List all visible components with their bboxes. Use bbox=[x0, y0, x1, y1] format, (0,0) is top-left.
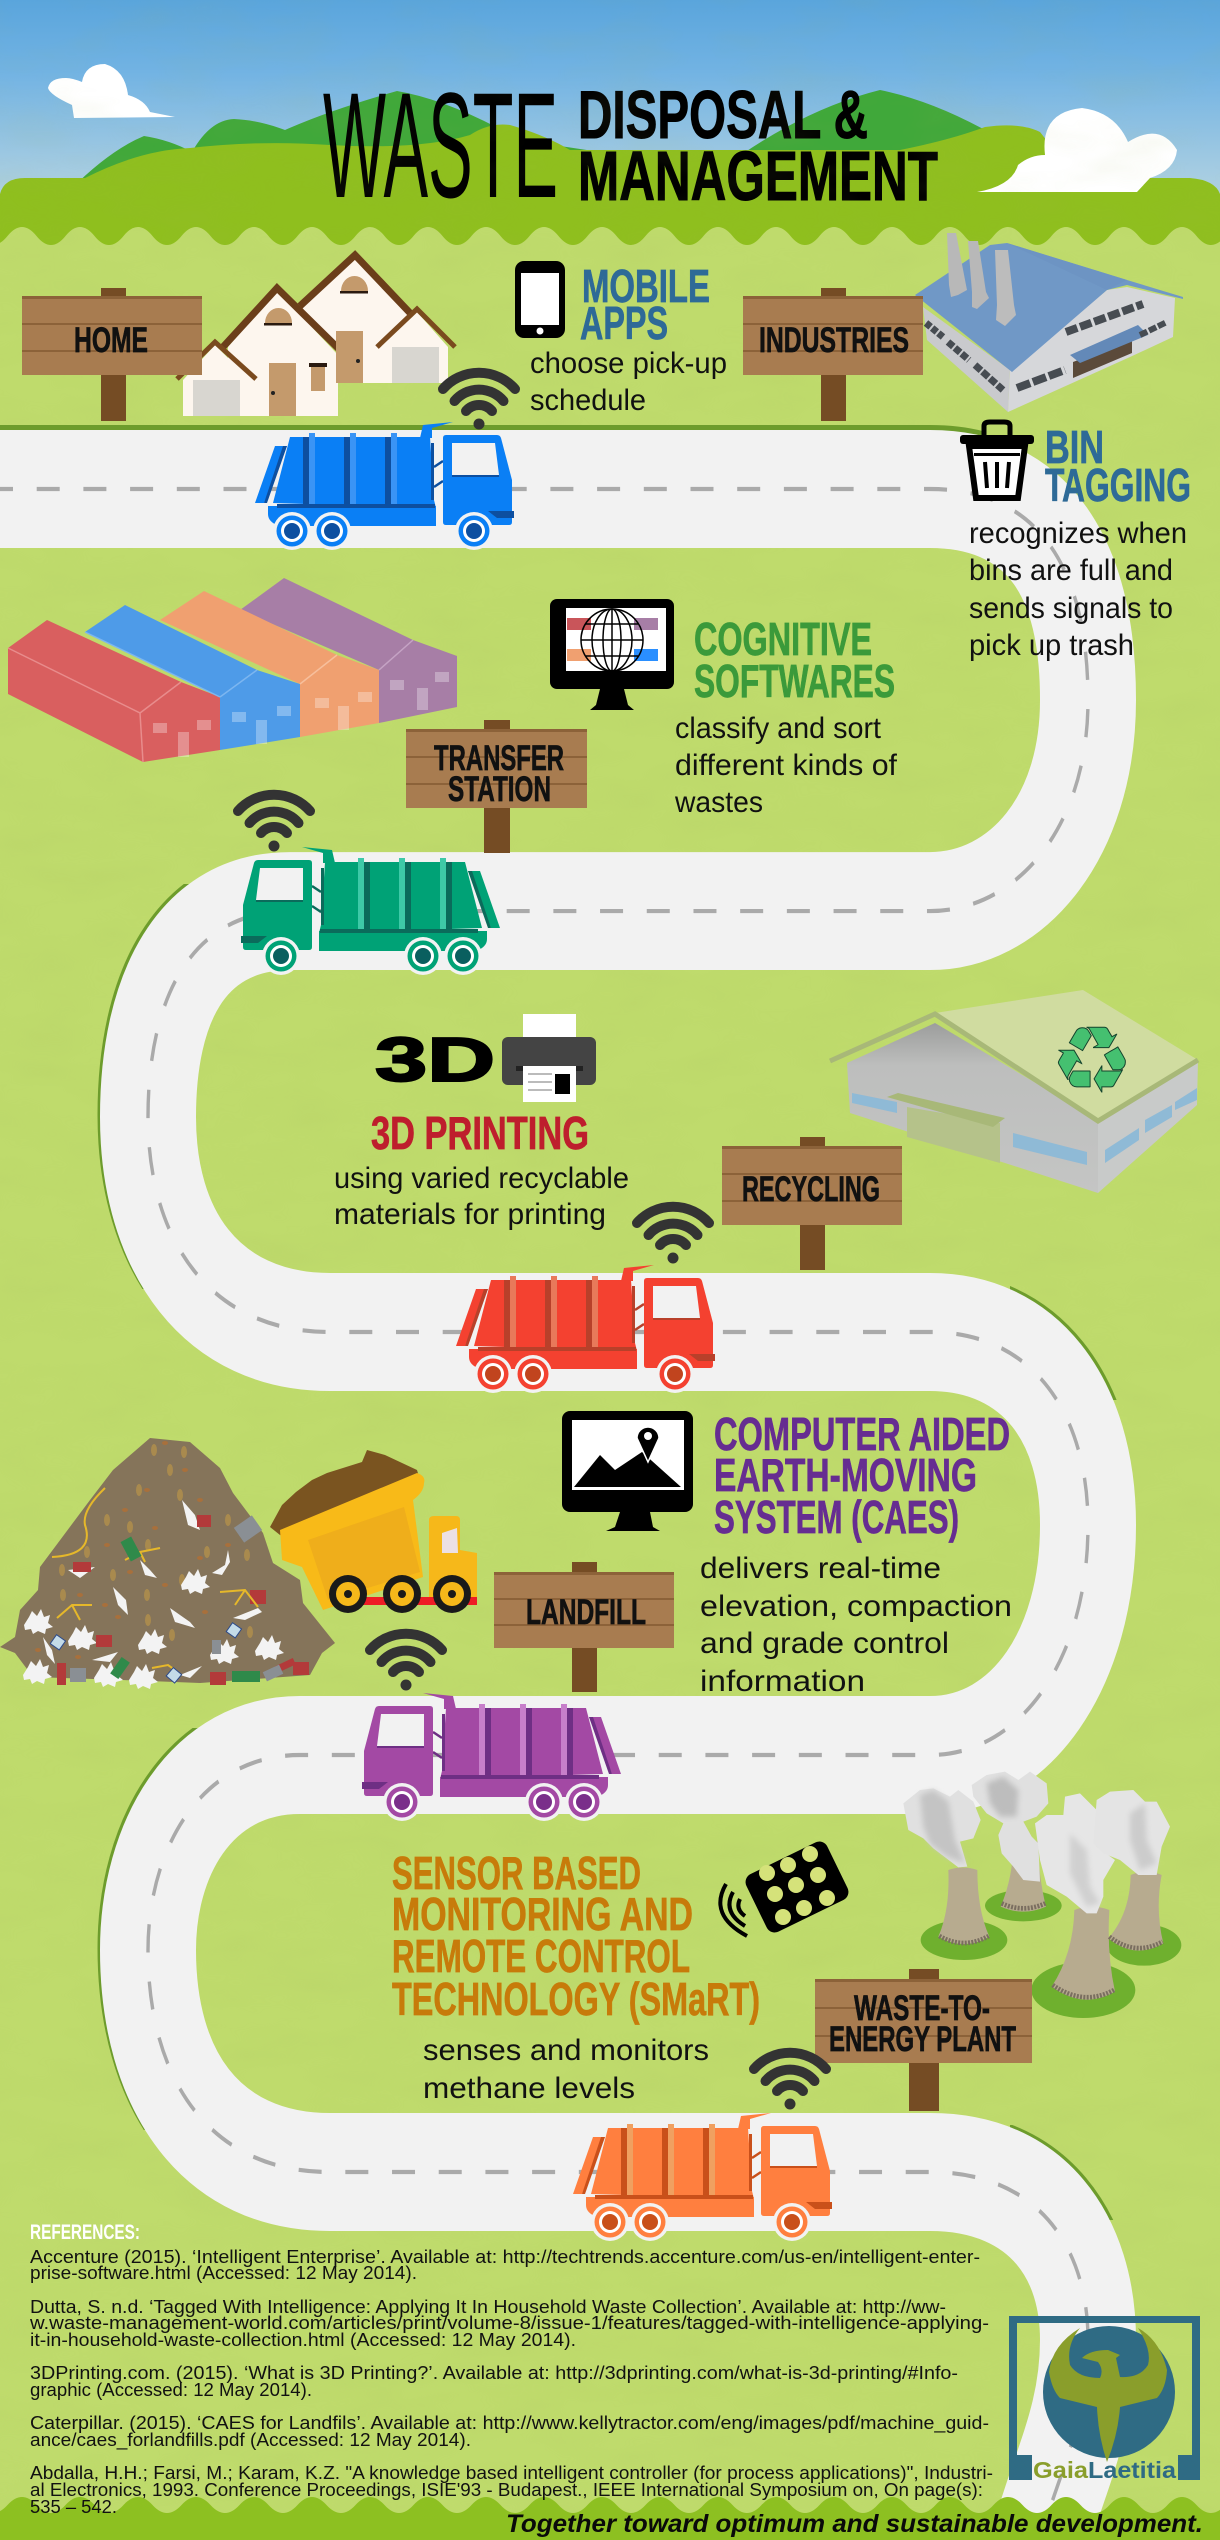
CAES text: elevation, compaction bbox=[700, 1590, 1012, 1623]
references: REFERENCES: bbox=[30, 2221, 140, 2244]
references: 3DPrinting.com. (2015). ‘What is 3D Printing?’. Available at: http://3dprinting.com/what-is-3d-printing/#Info- bbox=[30, 2363, 958, 2383]
icon: monitor with map bbox=[562, 1411, 693, 1531]
truck: red bbox=[456, 1265, 715, 1393]
bin tagging text: BIN bbox=[1045, 421, 1104, 473]
recycling building: ♻ bbox=[1051, 1007, 1133, 1114]
cloud left bbox=[48, 64, 175, 118]
references: prise-software.html (Accessed: 12 May 2014). bbox=[30, 2263, 417, 2283]
road shadows bbox=[0, 484, 1090, 2538]
sky bbox=[0, 0, 1220, 240]
sign: transfer station bbox=[406, 720, 587, 853]
sign: home bbox=[22, 288, 202, 421]
title: MANAGEMENT bbox=[578, 137, 938, 215]
mobile apps text: choose pick-up bbox=[530, 347, 727, 380]
road bbox=[0, 489, 1088, 2540]
references: it-in-household-waste-collection.html (Accessed: 12 May 2014). bbox=[30, 2330, 576, 2350]
cloud right bbox=[977, 108, 1177, 192]
CAES text bbox=[700, 1408, 1012, 1698]
references: al Electronics, 1993. Conference Proceedings, ISIE'93 - Budapest., IEEE International Symposium on, On page(s): bbox=[30, 2480, 983, 2500]
truck: green bbox=[241, 847, 500, 975]
title: WASTE bbox=[323, 61, 558, 229]
SMaRT text bbox=[392, 1847, 760, 2105]
cognitive softwares text: classify and sort bbox=[675, 712, 882, 745]
houses bbox=[177, 255, 455, 416]
icon: wifi orange truck bbox=[754, 2053, 826, 2110]
sign: transfer station: STATION bbox=[448, 770, 551, 809]
sign: landfill: LANDFILL bbox=[526, 1593, 646, 1632]
CAES text: information bbox=[700, 1665, 865, 1698]
SMaRT text: SENSOR BASED bbox=[392, 1847, 641, 1899]
CAES text: and grade control bbox=[700, 1627, 949, 1660]
mobile apps text: schedule bbox=[530, 384, 646, 417]
sign: waste-to-energy plant: WASTE-TO- bbox=[854, 1989, 990, 2028]
mobile apps text: APPS bbox=[580, 297, 668, 349]
icon: wifi blue truck bbox=[443, 373, 515, 430]
recycling building bbox=[830, 990, 1198, 1193]
truck: purple bbox=[362, 1693, 621, 1821]
icon: 3D printer: 3D bbox=[375, 1026, 495, 1095]
CAES text: COMPUTER AIDED bbox=[714, 1408, 1010, 1460]
mobile apps text: MOBILE bbox=[582, 260, 710, 312]
icon: sensor bbox=[720, 1839, 851, 1936]
references: Abdalla, H.H.; Farsi, M.; Karam, K.Z. "A knowledge based intelligent controller (for process applications)", Industri- bbox=[30, 2463, 993, 2483]
bin tagging text: pick up trash bbox=[969, 629, 1134, 662]
logo: Gaia Laetitia bbox=[1009, 2316, 1200, 2483]
SMaRT text: methane levels bbox=[423, 2072, 635, 2105]
factory bbox=[915, 233, 1183, 412]
cognitive softwares text bbox=[674, 613, 898, 819]
truck: orange bbox=[573, 2113, 832, 2241]
cognitive softwares text: different kinds of bbox=[675, 749, 898, 782]
references: w.waste-management-world.com/articles/print/volume-8/issue-1/features/tagged-with-intelligence-applying- bbox=[29, 2313, 989, 2333]
sign: landfill bbox=[494, 1562, 674, 1692]
SMaRT text: TECHNOLOGY (SMaRT) bbox=[392, 1973, 760, 2025]
3D printing text bbox=[334, 1107, 629, 1231]
icon: wifi purple truck bbox=[370, 1634, 442, 1690]
icon: monitor with globe bbox=[550, 599, 674, 710]
icon: trash bin bbox=[960, 422, 1034, 498]
tagline: Together toward optimum and sustainable development. bbox=[506, 2510, 1203, 2538]
bin tagging text: bins are full and bbox=[969, 554, 1173, 587]
references bbox=[29, 2221, 993, 2517]
references: Caterpillar. (2015). ‘CAES for Landfils’. Available at: http://www.kellytractor.com/eng/images/pdf/machine_guid- bbox=[30, 2413, 989, 2434]
hills: back dark green bbox=[70, 90, 1000, 190]
references: ance/caes_forlandfills.pdf (Accessed: 12 May 2014). bbox=[30, 2430, 471, 2451]
CAES text: EARTH-MOVING bbox=[714, 1449, 977, 1501]
sign: transfer station: TRANSFER bbox=[434, 739, 564, 778]
truck: blue bbox=[255, 422, 514, 550]
icon: wifi green truck bbox=[238, 795, 310, 852]
icon: 3D printer bbox=[375, 1014, 596, 1102]
road centre dashes bbox=[0, 489, 1088, 2540]
SMaRT text: senses and monitors bbox=[423, 2034, 709, 2067]
CAES text: delivers real-time bbox=[700, 1552, 941, 1585]
sign: recycling: RECYCLING bbox=[742, 1170, 880, 1209]
references: graphic (Accessed: 12 May 2014). bbox=[30, 2380, 312, 2400]
icon: phone bbox=[515, 261, 565, 338]
references: Dutta, S. n.d. ‘Tagged With Intelligence: Applying It In Household Waste Collection’. Available at: http://ww- bbox=[30, 2297, 946, 2317]
sign: industries bbox=[743, 288, 923, 421]
cognitive softwares text: SOFTWARES bbox=[694, 655, 895, 707]
dump truck bbox=[270, 1450, 477, 1613]
CAES text: SYSTEM (CAES) bbox=[714, 1491, 959, 1543]
title: DISPOSAL & bbox=[578, 77, 868, 153]
3D printing text: using varied recyclable bbox=[334, 1162, 629, 1195]
3D printing text: 3D PRINTING bbox=[371, 1107, 589, 1159]
cooling towers bbox=[903, 1772, 1181, 2018]
landfill pile bbox=[0, 1438, 335, 1689]
sign: waste-to-energy plant: ENERGY PLANT bbox=[829, 2020, 1016, 2059]
bottom grass band bbox=[0, 2497, 1220, 2540]
references: Accenture (2015). ‘Intelligent Enterprise’. Available at: http://techtrends.accenture.com/us-en/intelligent-enter- bbox=[30, 2247, 980, 2267]
3D printing text: materials for printing bbox=[334, 1198, 606, 1231]
sign: waste-to-energy plant bbox=[815, 1969, 1032, 2111]
sign: home: HOME bbox=[74, 321, 148, 360]
references: 535 – 542. bbox=[30, 2497, 117, 2517]
bin tagging text bbox=[969, 421, 1191, 662]
bin tagging text: recognizes when bbox=[969, 517, 1187, 550]
hills: front lime green bbox=[0, 124, 1220, 250]
mobile apps text bbox=[530, 260, 727, 417]
bin tagging text: sends signals to bbox=[969, 592, 1173, 625]
SMaRT text: REMOTE CONTROL bbox=[392, 1930, 690, 1982]
cognitive softwares text: COGNITIVE bbox=[694, 613, 872, 665]
SMaRT text: MONITORING AND bbox=[392, 1888, 693, 1940]
sign: recycling bbox=[722, 1137, 902, 1270]
icon: wifi red truck bbox=[637, 1207, 709, 1264]
cognitive softwares text: wastes bbox=[674, 786, 763, 819]
logo: Gaia Laetitia: Gaia bbox=[1033, 2457, 1088, 2483]
scalloped edge top bbox=[0, 227, 1220, 270]
logo: Gaia Laetitia: Laetitia bbox=[1088, 2457, 1176, 2483]
sign: industries: INDUSTRIES bbox=[759, 321, 909, 360]
warehouses bbox=[8, 578, 457, 762]
